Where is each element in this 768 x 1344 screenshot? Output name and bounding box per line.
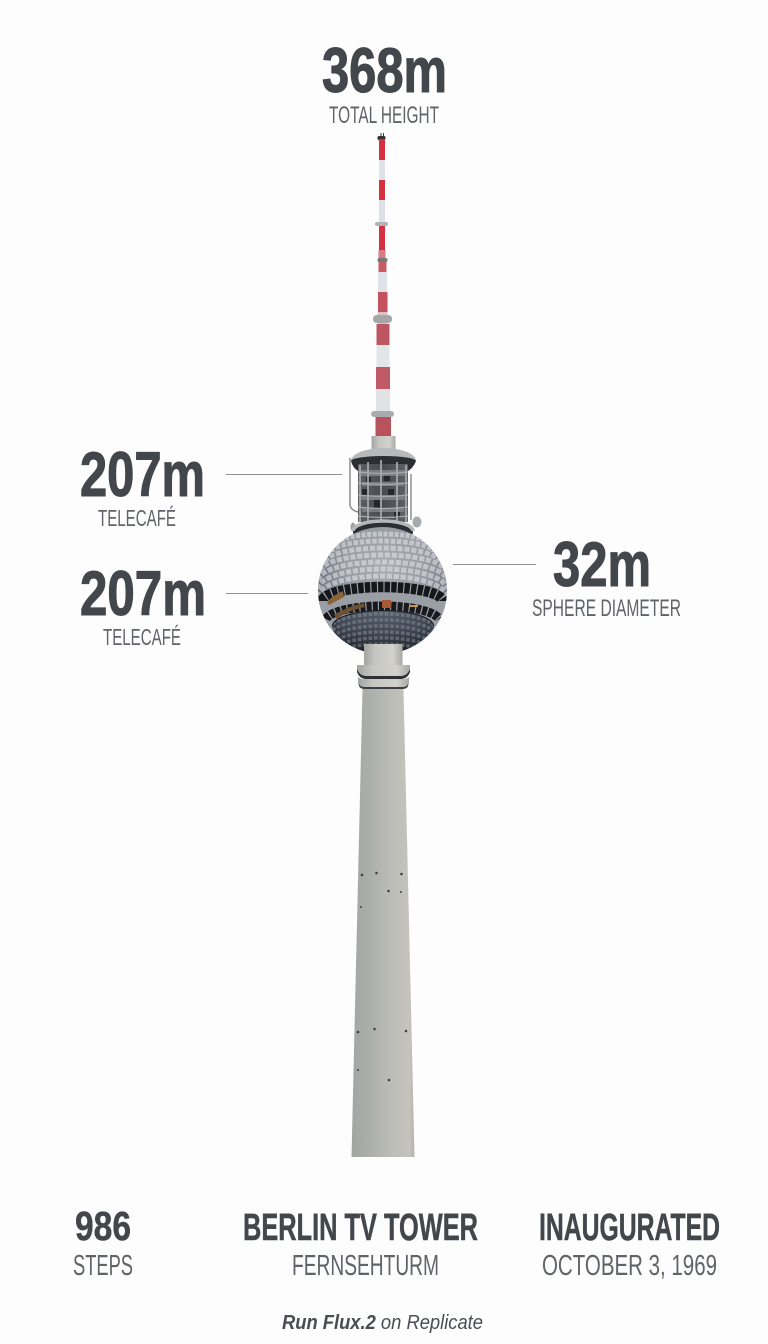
- neck: [364, 644, 402, 669]
- stat: steps: [73, 1203, 133, 1282]
- lower window band: [326, 600, 439, 619]
- sphere: [318, 527, 448, 659]
- subtitle: FERNSEHTURM: [292, 1250, 439, 1282]
- antenna mast: [371, 133, 394, 436]
- title block: [243, 1207, 478, 1282]
- number: 368m: 368m: [322, 36, 447, 106]
- leader line: sphere diameter: [453, 564, 536, 566]
- equipment cage: [350, 458, 411, 522]
- sphere dimple rows: [318, 534, 447, 597]
- concrete shaft: [352, 689, 414, 1157]
- callout: sphere diameter: [532, 530, 681, 622]
- antenna platform disc: [351, 448, 416, 461]
- callout: total height: [322, 36, 447, 129]
- dish antennas: [412, 516, 422, 528]
- mast platforms: [375, 222, 388, 226]
- label: telecafé: TELECAFÉ: [98, 505, 176, 531]
- number: 32m: 32m: [553, 530, 651, 600]
- platform disc underside: [351, 455, 416, 472]
- credit line: Run Flux.2 on Replicate: [282, 1312, 483, 1334]
- label: telecafé: TELECAFÉ: [103, 624, 181, 650]
- label: total height: TOTAL HEIGHT: [329, 102, 439, 129]
- number: 207m: 207m: [80, 559, 206, 629]
- leader line: telecafé upper: [226, 474, 342, 476]
- label: sphere diameter: SPHERE DIAMETER: [532, 595, 681, 622]
- leader line: telecafé lower: [226, 592, 308, 594]
- upper window band: [322, 587, 442, 605]
- tower illustration: [318, 133, 448, 1157]
- neck collar: [357, 665, 410, 689]
- callout: telecafé lower: [80, 559, 206, 650]
- middle grey strip: [318, 582, 447, 632]
- upper collar: [372, 436, 396, 450]
- callout: telecafé upper: [80, 440, 205, 531]
- lower flange: [353, 522, 413, 537]
- stat: inauguration date: [539, 1207, 720, 1282]
- label: steps: STEPS: [73, 1250, 133, 1282]
- title: BERLIN TV TOWER: [243, 1207, 478, 1249]
- lower bowl: [332, 610, 434, 652]
- number: 986: 986: [75, 1203, 131, 1249]
- number: 207m: 207m: [80, 440, 205, 510]
- shaft rivets: [357, 872, 407, 1081]
